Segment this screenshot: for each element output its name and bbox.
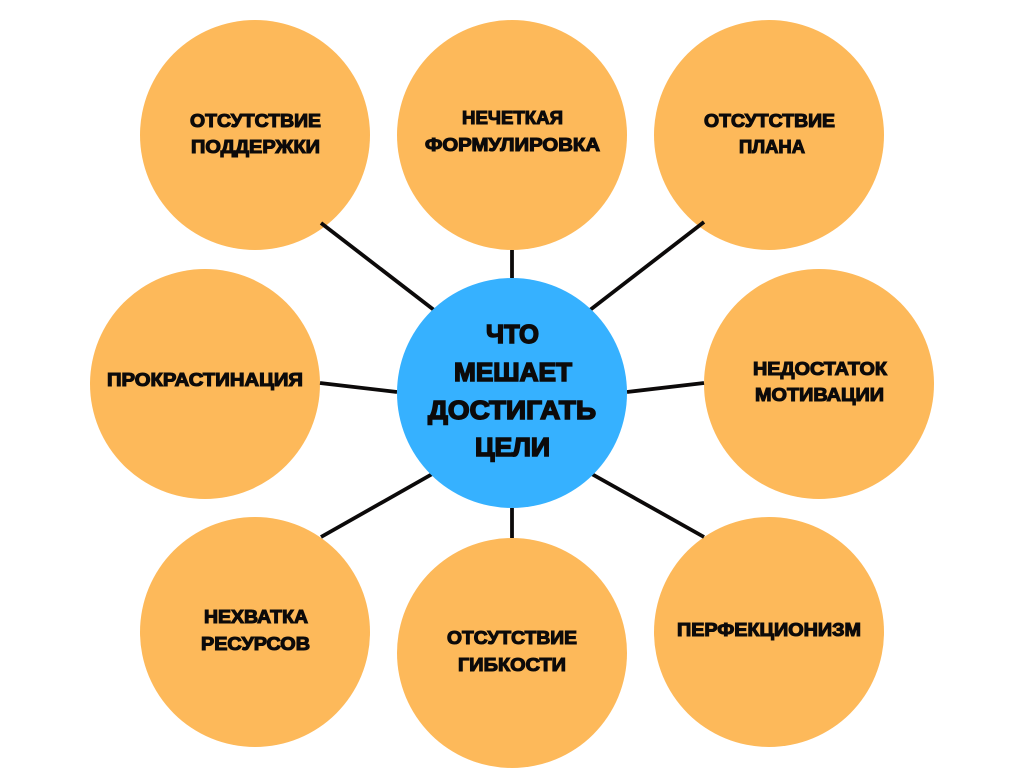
central node: what prevents achieving goals: МЕШАЕТ: [454, 357, 572, 387]
node: lack of resources: НЕХВАТКА: [204, 606, 308, 627]
node: perfectionism: [654, 517, 884, 747]
node: lack of plan: [654, 20, 884, 250]
node: lack of motivation: МОТИВАЦИИ: [755, 384, 884, 405]
central node: what prevents achieving goals: ДОСТИГАТЬ: [428, 395, 596, 425]
node: lack of flexibility: ГИБКОСТИ: [458, 654, 566, 675]
central node: what prevents achieving goals: ЧТО: [486, 319, 539, 349]
node: lack of flexibility: [397, 538, 627, 768]
node: procrastination: [90, 269, 320, 499]
node: perfectionism: ПЕРФЕКЦИОНИЗМ: [677, 619, 861, 640]
node: lack of resources: [140, 517, 370, 747]
node: lack of support: [140, 20, 370, 250]
node: lack of plan: ПЛАНА: [739, 136, 805, 157]
central node: what prevents achieving goals: ЦЕЛИ: [475, 432, 550, 462]
node: procrastination: ПРОКРАСТИНАЦИЯ: [107, 369, 303, 390]
node: lack of support: ОТСУТСТВИЕ: [190, 110, 321, 131]
node: vague wording: ФОРМУЛИРОВКА: [425, 134, 600, 155]
node: vague wording: [397, 20, 627, 250]
node: lack of flexibility: ОТСУТСТВИЕ: [447, 627, 577, 648]
connector lines: [320, 222, 704, 538]
central node: what prevents achieving goals: [397, 278, 627, 508]
node: lack of motivation: НЕДОСТАТОК: [753, 358, 888, 379]
node: lack of plan: ОТСУТСТВИЕ: [704, 110, 835, 131]
node: lack of resources: РЕСУРСОВ: [201, 633, 310, 654]
node: lack of support: ПОДДЕРЖКИ: [191, 136, 320, 157]
node: vague wording: НЕЧЕТКАЯ: [462, 107, 563, 128]
node: lack of motivation: [704, 269, 934, 499]
